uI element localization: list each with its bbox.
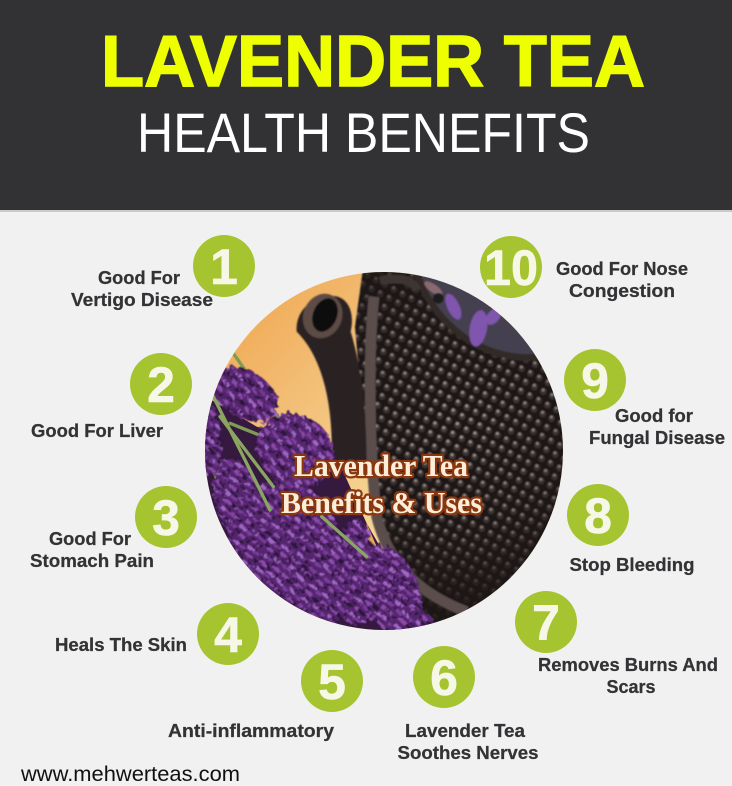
benefit 7: Removes Burns And	[538, 655, 718, 675]
central circular photo: teapot and lavender	[205, 272, 563, 630]
benefit 6: Soothes Nerves	[398, 743, 538, 763]
footer website url: www.mehwerteas.com	[20, 763, 240, 786]
benefit 7: Scars	[606, 677, 656, 697]
center caption: Lavender Tea Benefits & Uses: Benefits & Uses	[281, 485, 482, 520]
center caption: Lavender Tea Benefits & Uses: Lavender Tea	[294, 448, 468, 483]
benefit 9: Good for	[615, 406, 693, 426]
benefit 10: Good For Nose	[556, 259, 688, 279]
teapot spout	[297, 296, 367, 463]
handle strap	[370, 297, 467, 612]
benefit 9	[564, 349, 725, 448]
benefit 8	[567, 484, 694, 575]
title: Lavender Tea: LAVENDER TEA	[101, 22, 645, 102]
benefit 2	[31, 353, 192, 441]
benefit 8: Stop Bleeding	[570, 555, 694, 575]
benefit 6: Lavender Tea	[405, 721, 526, 741]
benefit 3	[30, 486, 197, 571]
benefit 4: Heals The Skin	[55, 635, 187, 655]
benefit 9: 9	[581, 353, 609, 409]
subtitle: Health Benefits: HEALTH BENEFITS	[137, 101, 590, 164]
benefit 6	[398, 646, 538, 763]
foreground stems	[213, 397, 367, 557]
benefit 1	[71, 235, 255, 310]
orange gap between flowers	[366, 524, 376, 546]
dark shade under the lavender	[205, 400, 425, 630]
benefit 3: 3	[152, 490, 180, 546]
benefit 4	[55, 603, 259, 665]
benefit 2: Good For Liver	[31, 421, 163, 441]
benefit 5: 5	[318, 654, 346, 710]
wooden table background	[200, 260, 570, 640]
benefit 7: 7	[532, 595, 560, 651]
lavender stems	[205, 352, 280, 480]
benefit 10: Congestion	[569, 281, 675, 301]
benefit 8: 8	[584, 488, 612, 544]
benefit 5: Anti-inflammatory	[168, 721, 334, 741]
benefit 10: 10	[484, 240, 538, 296]
header banner	[0, 0, 732, 212]
benefit 2: 2	[147, 357, 175, 413]
center caption: Lavender Tea Benefits & Uses	[279, 452, 484, 516]
teapot opening with dried lavender	[415, 275, 538, 361]
teapot body	[296, 267, 570, 640]
benefit 10	[480, 236, 688, 301]
benefit 9: Fungal Disease	[589, 428, 725, 448]
benefit 5	[168, 650, 363, 741]
benefit 6: 6	[430, 650, 458, 706]
benefit 4: 4	[214, 607, 242, 663]
benefit 1: Vertigo Disease	[71, 290, 213, 310]
benefit 3: Good For	[49, 529, 131, 549]
lavender flowers	[205, 364, 434, 630]
benefit 3: Stomach Pain	[30, 551, 154, 571]
benefit 1: Good For	[98, 268, 180, 288]
benefit 7	[515, 591, 718, 697]
benefit 1: 1	[210, 239, 238, 295]
